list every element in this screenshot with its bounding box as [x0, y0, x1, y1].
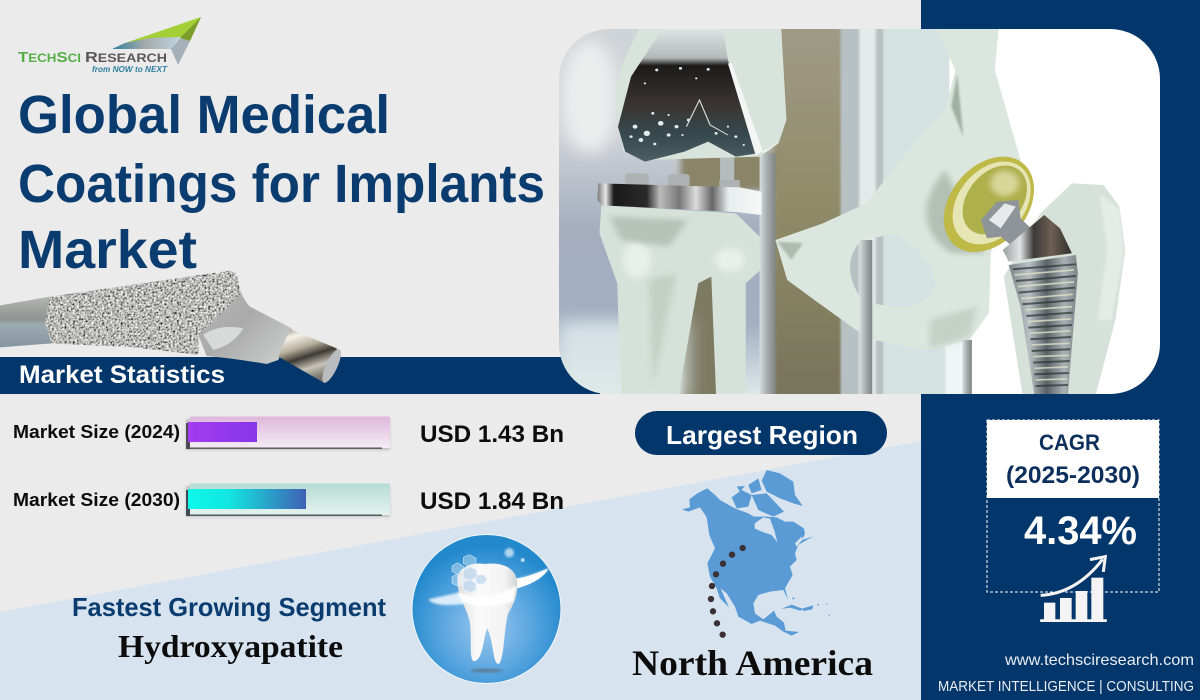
label 2024: Market Size (2024): [13, 422, 180, 442]
label 2030: Market Size (2030): [13, 490, 180, 510]
CAGR period: (2025-2030): [1006, 462, 1140, 489]
title: Market: [18, 220, 197, 280]
website: www.techsciresearch.com: [1004, 652, 1194, 669]
femoral implant bone: [1004, 183, 1125, 395]
title: [18, 85, 545, 280]
icon: growth chart: [1040, 557, 1107, 622]
femur chrome: [618, 28, 758, 162]
gulf of st lawrence: [795, 537, 803, 547]
bar: market size 2030: [13, 484, 564, 517]
segment heading: Fastest Growing Segment: [72, 592, 386, 622]
title: Coatings for Implants: [18, 154, 545, 214]
track 2030: [186, 484, 390, 517]
track 2024: [186, 416, 390, 450]
callout: largest region: [635, 411, 887, 455]
porous coating: [45, 271, 241, 355]
CAGR label: CAGR: [1039, 430, 1100, 455]
rod: [760, 153, 775, 400]
tooth: [457, 563, 517, 664]
panel: CAGR: [987, 420, 1159, 622]
bar: market size 2024: [13, 416, 564, 450]
logo: TechSci Research: RESEARCH: [85, 49, 167, 66]
logo: TechSci Research: [18, 17, 201, 74]
greenland: [762, 470, 803, 506]
femoral neck and head: [981, 200, 1030, 244]
continent: [682, 488, 814, 636]
logo wordmark: TECHSCI: [18, 49, 81, 66]
value 2024: USD 1.43 Bn: [420, 421, 564, 448]
implant shaft: [0, 297, 52, 347]
value 2030: USD 1.84 Bn: [420, 488, 564, 515]
map: North America: [682, 470, 830, 638]
threaded stem: [1009, 255, 1078, 395]
callout: largest region: Largest Region: [666, 420, 858, 450]
CAGR value: 4.34%: [1024, 509, 1137, 553]
CAGR header box: [987, 420, 1159, 498]
dashed frame: [987, 420, 1159, 592]
heading: market statistics: Market Statistics: [19, 361, 225, 389]
diagonal light blue panel: [0, 441, 921, 700]
pelvis: [775, 27, 1021, 351]
tibia tray pegs: [625, 174, 740, 188]
market statistics band: [0, 357, 600, 394]
tibia bone: [599, 205, 760, 395]
chrome stem shoulder: [1003, 215, 1072, 262]
right navy column: [921, 0, 1200, 700]
fill 2030: [188, 489, 306, 509]
photo: knee and hip implants on bone models: [550, 20, 1183, 400]
fill 2024: [188, 422, 257, 442]
logo tagline: from NOW to NEXT: [92, 64, 168, 74]
implant cap: [278, 329, 339, 383]
logo wing: [112, 17, 201, 65]
rods front: [860, 240, 872, 400]
tibia tray: [597, 183, 762, 215]
femur bone: [615, 28, 786, 160]
segment name: Hydroxyapatite: [118, 628, 343, 664]
arctic islands: [732, 478, 784, 517]
caribbean islands: [781, 597, 830, 616]
region name: North America: [632, 643, 873, 683]
icon: tooth in blue circle: [412, 534, 562, 684]
dotted marker line: [708, 545, 746, 638]
hexagon pattern: [463, 567, 487, 593]
title: Global Medical: [18, 85, 390, 145]
hudson bay: [755, 517, 777, 542]
femoral stem implant image: [0, 271, 345, 385]
acetabular cup: [944, 156, 1034, 252]
implant neck: [198, 272, 292, 364]
